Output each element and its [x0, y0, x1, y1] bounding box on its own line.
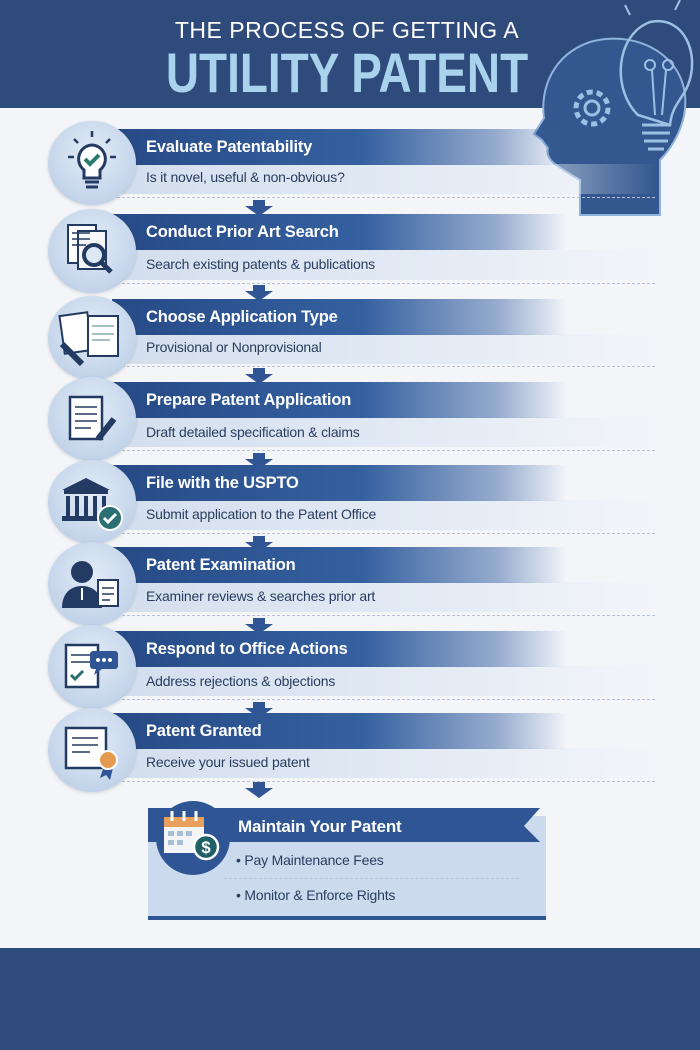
- step 3: Choose Application Type: [146, 308, 338, 326]
- step 8: Patent Granted: [146, 722, 261, 740]
- icon: calendar with dollar: $: [201, 838, 211, 857]
- arrow: [245, 453, 273, 465]
- step 2: Search existing patents & publications: [146, 256, 375, 272]
- step 1: Is it novel, useful & non-obvious?: [146, 169, 345, 185]
- footer band: [0, 948, 700, 1050]
- step 4: Draft detailed specification & claims: [146, 424, 360, 440]
- panel: maintain your patent: • Pay Maintenance Fees: [236, 852, 384, 868]
- step 8: Receive your issued patent: [146, 754, 310, 770]
- step 3: [47, 296, 655, 382]
- step 3: Provisional or Nonprovisional: [146, 339, 322, 355]
- step 7: Address rejections & objections: [146, 673, 335, 689]
- icon: certificate with ribbon: [48, 708, 136, 792]
- icon: documents magnifier: [48, 209, 136, 293]
- panel: maintain your patent: Maintain Your Patent: [238, 817, 402, 836]
- step 1: [47, 121, 655, 214]
- arrow: [245, 782, 273, 798]
- icon: two forms and pen: [48, 296, 136, 380]
- arrow: [245, 285, 273, 299]
- step 4: Prepare Patent Application: [146, 391, 351, 409]
- icon: document and pencil: [48, 377, 136, 461]
- icon: lightbulb check: [48, 121, 136, 205]
- step 5: Submit application to the Patent Office: [146, 506, 376, 522]
- step 5: [47, 460, 655, 547]
- arrow: [245, 536, 273, 547]
- step 6: Examiner reviews & searches prior art: [146, 588, 375, 604]
- icon: examiner with clipboard: [48, 542, 136, 626]
- step 6: Patent Examination: [146, 556, 296, 574]
- arrow: [245, 618, 273, 631]
- step 7: Respond to Office Actions: [146, 640, 348, 658]
- arrow: [245, 368, 273, 382]
- step 1: Evaluate Patentability: [146, 138, 312, 156]
- step 7: [47, 625, 655, 713]
- icon: document with chat bubble: [48, 625, 136, 709]
- icon: calendar with dollar: [156, 801, 230, 875]
- step 6: [47, 542, 655, 631]
- arrow: [245, 200, 273, 214]
- icon: building with check: [48, 460, 136, 544]
- step 5: File with the USPTO: [146, 474, 299, 492]
- step 2: Conduct Prior Art Search: [146, 223, 339, 241]
- icon: head with gear and bulb: [532, 0, 694, 216]
- step 2: [47, 209, 655, 299]
- panel: maintain your patent: [148, 801, 546, 920]
- title line 1: THE PROCESS OF GETTING A: [175, 17, 519, 43]
- arrow: [245, 702, 273, 713]
- header banner: [0, 0, 700, 108]
- title line 2: UTILITY PATENT: [166, 41, 528, 104]
- step 8: [47, 708, 655, 798]
- panel: maintain your patent: • Monitor & Enforce Rights: [236, 887, 395, 903]
- step 4: [47, 377, 655, 465]
